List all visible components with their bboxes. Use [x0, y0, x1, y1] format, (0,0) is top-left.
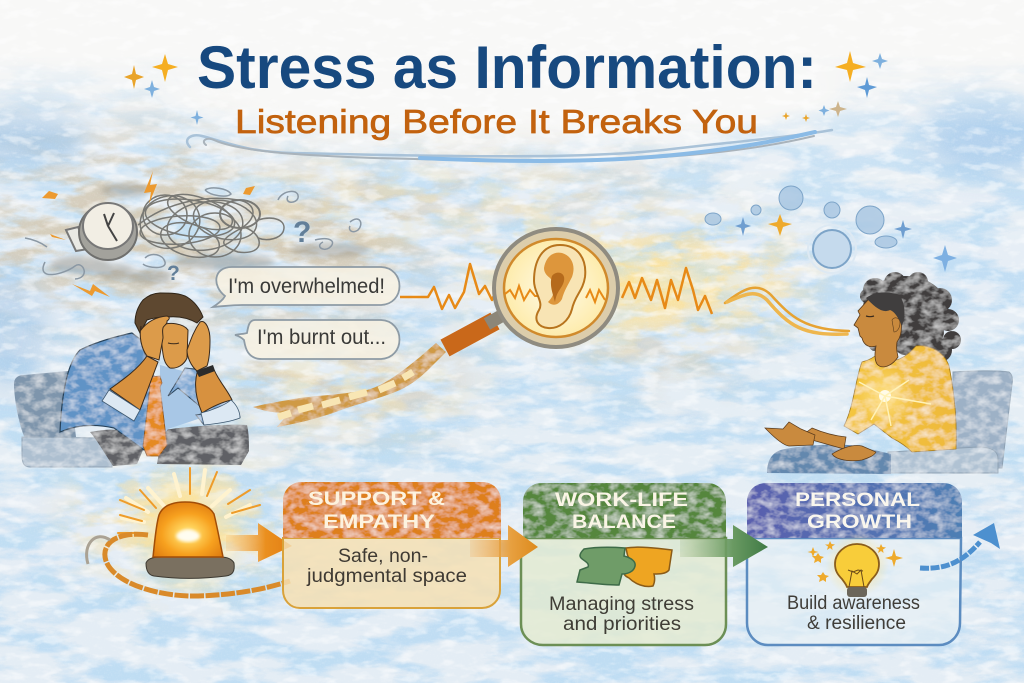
card: work-life balance: BALANCE: [572, 512, 676, 533]
clock: [66, 203, 137, 260]
card: work-life balance: Managing stress: [549, 594, 694, 615]
card body: [283, 538, 500, 608]
card: work-life balance: and priorities: [563, 614, 681, 635]
forearms: [796, 428, 846, 449]
ear: [892, 318, 900, 332]
tangled scribble: [134, 187, 284, 263]
lens ring: [494, 229, 618, 347]
card header: [283, 482, 501, 538]
card body: [747, 538, 961, 645]
alarm beacon: [87, 460, 290, 600]
lightning bolts and warning marks: [42, 171, 255, 297]
card: personal growth: [747, 483, 962, 645]
man with head in hands: [14, 293, 249, 467]
stress cloud: clock, scribble and symbols: [25, 171, 370, 297]
card: personal growth: Build awareness: [787, 593, 920, 614]
open hands: [765, 422, 815, 446]
grey clouds behind the scribble: [50, 183, 370, 284]
hands: [140, 316, 169, 360]
sparkles around the title: [124, 51, 888, 125]
path from the man to the magnifier: [253, 343, 446, 427]
curly hair: [860, 272, 961, 364]
right sleeve: [168, 368, 240, 425]
title: Stress as Information:: [197, 34, 817, 101]
right arm: [196, 367, 232, 413]
puzzle pieces: [577, 547, 672, 587]
card: work-life balance: WORK-LIFE: [555, 490, 688, 511]
question marks: ?: [167, 262, 180, 285]
sweater: [844, 346, 956, 452]
question marks: ?: [293, 216, 311, 249]
legs: [767, 445, 891, 474]
face and neck: [854, 296, 902, 367]
wave inside lens: [505, 286, 605, 302]
card: support and empathy: Safe, non-: [338, 546, 428, 567]
signal waveform out of the lens: [622, 268, 712, 314]
card: support and empathy: [283, 482, 501, 608]
arrow from work-life to personal growth: [680, 525, 768, 567]
card: support and empathy: judgmental space: [306, 566, 467, 587]
card header: [747, 483, 962, 538]
card: work-life balance: [521, 483, 726, 645]
rising dashed blue arrow: [920, 523, 1000, 568]
light bulb: [825, 533, 889, 597]
head: [160, 323, 188, 368]
signal waveform into the ear: [400, 264, 503, 309]
armchair: [14, 371, 112, 467]
shirt cuffs: [102, 390, 240, 425]
card: support and empathy: EMPATHY: [323, 512, 435, 533]
tie: [143, 376, 167, 456]
ear: [534, 245, 585, 328]
speech bubble: I'm overwhelmed: [213, 267, 400, 307]
card body: [521, 538, 726, 645]
dome: [153, 502, 223, 557]
card header: [523, 483, 726, 538]
base: [146, 557, 234, 578]
speech bubble: I'm overwhelmed: I'm overwhelmed!: [228, 275, 385, 298]
swoosh under the subtitle: [187, 130, 832, 161]
speech bubble: I'm burnt out: [235, 320, 400, 359]
glow and rays: [118, 460, 260, 600]
shirt: [60, 333, 160, 450]
flowing ribbon toward the woman: [725, 288, 849, 334]
arrow from support to work-life: [470, 525, 538, 567]
card: personal growth: & resilience: [807, 613, 906, 634]
thought bubbles and sparkles above the woman: [705, 186, 957, 273]
watch: [196, 365, 215, 377]
hair: [135, 293, 203, 333]
subtitle: Listening Before It Breaks You: [235, 103, 758, 140]
heart glow: [855, 366, 931, 426]
small worry doodles: [25, 188, 361, 279]
speech bubble: I'm burnt out: I'm burnt out...: [257, 326, 386, 349]
trousers: [90, 425, 249, 466]
card: personal growth: PERSONAL: [795, 490, 920, 511]
hair framing the face: [866, 292, 904, 326]
stars around the bulb: [808, 541, 903, 582]
question marks: [167, 216, 311, 285]
glow behind signal: [622, 279, 732, 305]
woman with eyes closed: [765, 272, 1012, 474]
swirl loop: [87, 537, 110, 564]
dashed swirl: [105, 534, 290, 596]
card: support and empathy: SUPPORT &: [308, 489, 445, 510]
arrow from beacon to first card: [226, 523, 292, 562]
left arm: [110, 356, 158, 410]
card: personal growth: GROWTH: [807, 512, 912, 533]
magnifying glass: [445, 229, 618, 348]
handle: [445, 321, 495, 348]
armchair: [888, 371, 1012, 473]
light shirt underside: [160, 365, 210, 439]
